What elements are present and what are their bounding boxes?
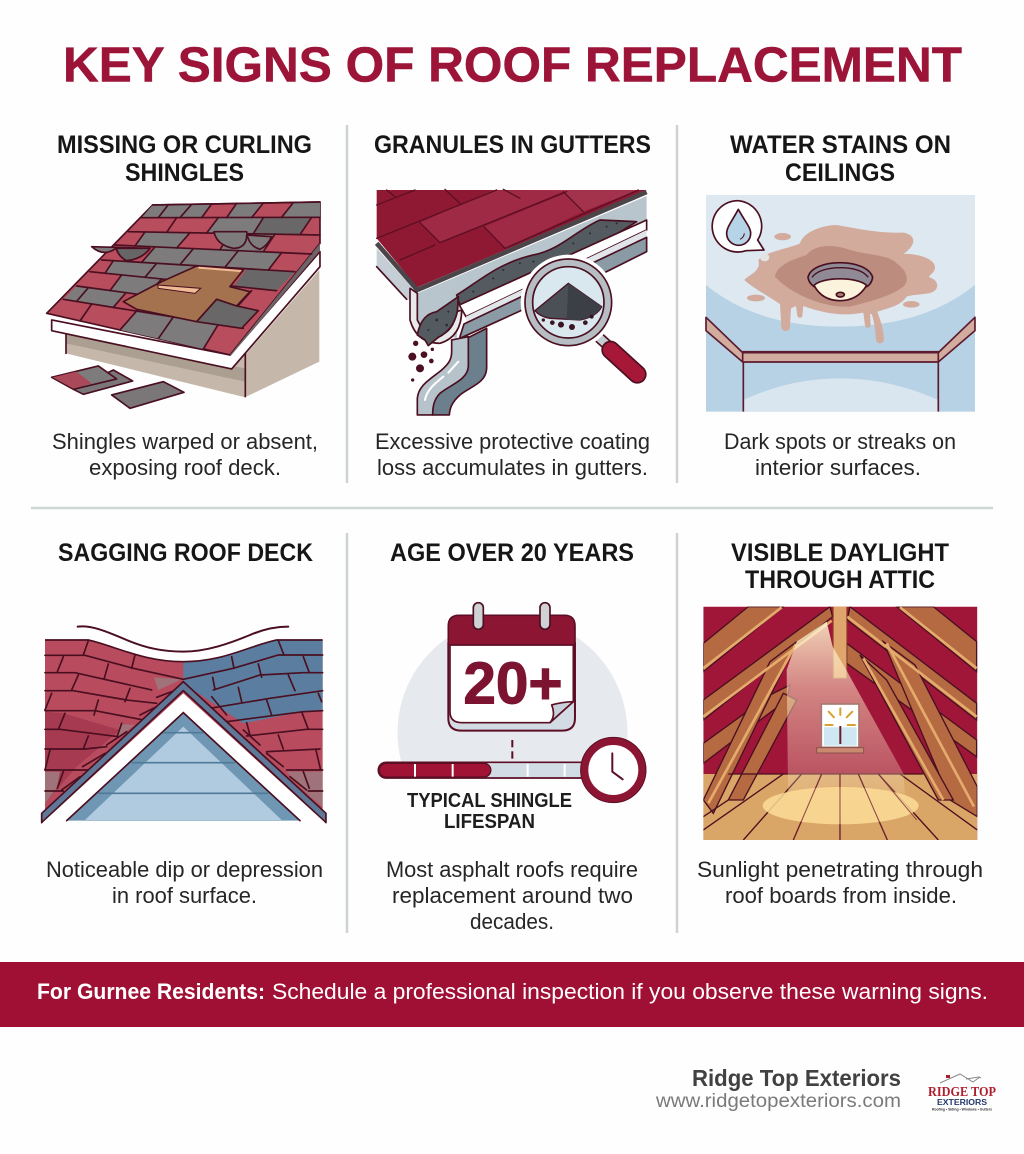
banner: call to action: For Gurnee Residents: bbox=[37, 979, 265, 1004]
heading: visible daylight through attic bbox=[731, 539, 949, 594]
caption: visible daylight through attic: roof boards from inside. bbox=[725, 883, 957, 908]
panel: granules in gutters bbox=[374, 131, 651, 480]
panel: sagging roof deck bbox=[42, 539, 326, 908]
illustration: attic with sunbeam bbox=[703, 605, 977, 840]
logo: Ridge Top Exteriors bbox=[928, 1074, 996, 1112]
footer: company name and website bbox=[655, 1065, 901, 1112]
heading: water stains on ceilings bbox=[730, 131, 951, 187]
caption: age over 20 years: replacement around two bbox=[392, 883, 633, 908]
logo: Ridge Top Exteriors: RIDGE TOP bbox=[928, 1084, 996, 1099]
title: KEY SIGNS OF ROOF REPLACEMENT bbox=[63, 38, 962, 92]
illustration: gutter with granules and magnifier bbox=[377, 189, 647, 415]
calendar number: 20+ bbox=[463, 649, 563, 716]
illustration: stained ceiling with light bbox=[706, 195, 975, 412]
gauge label: TYPICAL SHINGLE bbox=[407, 790, 572, 812]
caption: age over 20 years bbox=[386, 857, 638, 934]
footer: company name and website: Ridge Top Exteriors bbox=[692, 1065, 901, 1091]
panel: missing or curling shingles bbox=[47, 131, 320, 480]
panel: age over 20 years bbox=[378, 539, 646, 934]
caption: sagging roof deck: Noticeable dip or depression bbox=[46, 857, 323, 882]
footer: company name and website: www.ridgetopexteriors.com bbox=[655, 1091, 901, 1112]
illustration: sagging roofline over gable bbox=[42, 626, 326, 823]
caption: water stains on ceilings: interior surfaces. bbox=[755, 455, 921, 480]
caption: sagging roof deck: in roof surface. bbox=[112, 883, 257, 908]
heading: missing or curling shingles: MISSING OR CURLING bbox=[57, 131, 312, 159]
logo: Ridge Top Exteriors: Roofing • Siding • Windows • Gutters bbox=[932, 1108, 992, 1112]
caption: granules in gutters: Excessive protective coating bbox=[375, 429, 650, 454]
caption: water stains on ceilings: Dark spots or streaks on bbox=[724, 429, 956, 454]
heading: missing or curling shingles: SHINGLES bbox=[125, 159, 244, 187]
panel: visible daylight through attic bbox=[697, 539, 983, 908]
caption: age over 20 years: Most asphalt roofs require bbox=[386, 857, 638, 882]
caption: visible daylight through attic: Sunlight penetrating through bbox=[697, 857, 983, 882]
heading: sagging roof deck: SAGGING ROOF DECK bbox=[58, 539, 313, 567]
caption: missing or curling shingles bbox=[52, 429, 318, 480]
caption: sagging roof deck bbox=[46, 857, 323, 908]
caption: missing or curling shingles: exposing roof deck. bbox=[89, 455, 281, 480]
illustration: damaged shingle roof bbox=[47, 202, 320, 408]
illustration: calendar and lifespan gauge bbox=[378, 603, 646, 803]
heading: missing or curling shingles bbox=[57, 131, 312, 187]
caption: visible daylight through attic bbox=[697, 857, 983, 908]
caption: water stains on ceilings bbox=[724, 429, 956, 480]
panel: water stains on ceilings bbox=[706, 131, 975, 480]
heading: water stains on ceilings: WATER STAINS ON bbox=[730, 131, 951, 159]
heading: visible daylight through attic: THROUGH ATTIC bbox=[745, 566, 935, 594]
caption: missing or curling shingles: Shingles warped or absent, bbox=[52, 429, 318, 454]
caption: age over 20 years: decades. bbox=[470, 909, 554, 934]
banner: call to action: Schedule a professional inspection if you observe these warning signs. bbox=[272, 979, 988, 1004]
heading: granules in gutters: GRANULES IN GUTTERS bbox=[374, 131, 651, 159]
gauge label: LIFESPAN bbox=[444, 811, 535, 833]
caption: granules in gutters: loss accumulates in gutters. bbox=[377, 455, 648, 480]
heading: age over 20 years: AGE OVER 20 YEARS bbox=[390, 539, 634, 567]
logo: Ridge Top Exteriors: EXTERIORS bbox=[937, 1098, 988, 1107]
gauge label bbox=[407, 790, 572, 833]
caption: granules in gutters bbox=[375, 429, 650, 480]
heading: visible daylight through attic: VISIBLE DAYLIGHT bbox=[731, 539, 949, 567]
heading: water stains on ceilings: CEILINGS bbox=[785, 159, 895, 187]
banner: call to action bbox=[0, 962, 1024, 1027]
